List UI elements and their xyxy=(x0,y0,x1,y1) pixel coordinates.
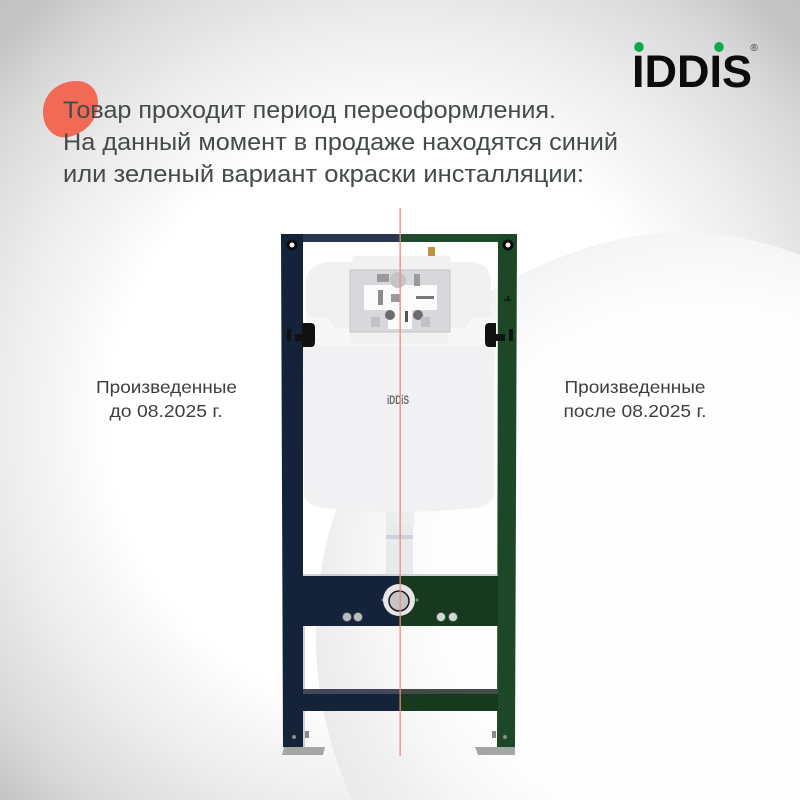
decorative coral blob xyxy=(43,81,98,137)
frame: blue half xyxy=(281,234,400,747)
frame: green half xyxy=(400,234,517,747)
panel with instructions xyxy=(350,270,450,332)
label: after 08.2025 xyxy=(564,377,706,421)
mark on right post xyxy=(504,296,511,301)
drain pipe xyxy=(386,510,414,574)
label: before 08.2025: Произведенные xyxy=(96,377,237,397)
heading text: или зеленый вариант окраски инсталляции: xyxy=(63,161,584,188)
label: after 08.2025: после 08.2025 г. xyxy=(564,401,706,421)
heading text xyxy=(63,97,618,188)
brass valve xyxy=(428,247,435,257)
logo: IDDIS: ® xyxy=(750,43,758,54)
label: before 08.2025 xyxy=(96,377,237,421)
heading text: На данный момент в продаже находятся синий xyxy=(63,129,618,156)
frame inner edge shading xyxy=(303,574,498,747)
frame mounting holes xyxy=(286,240,514,739)
logo: IDDIS: IDDIS xyxy=(632,46,752,97)
cistern lower body xyxy=(303,346,494,512)
brand mark on cistern: iDDiS xyxy=(387,395,409,407)
red divider line xyxy=(400,208,401,756)
flush port xyxy=(382,584,418,616)
installation frame xyxy=(281,234,517,755)
bolts blue side xyxy=(342,612,362,622)
cistern ledge xyxy=(306,317,491,346)
bolts green side xyxy=(436,612,458,622)
heading text: Товар проходит период переоформления. xyxy=(63,97,556,124)
feet xyxy=(282,731,515,755)
black side clips xyxy=(287,323,513,347)
label: before 08.2025: до 08.2025 г. xyxy=(110,401,222,421)
cistern upper body xyxy=(306,256,491,346)
label: after 08.2025: Произведенные xyxy=(564,377,706,397)
